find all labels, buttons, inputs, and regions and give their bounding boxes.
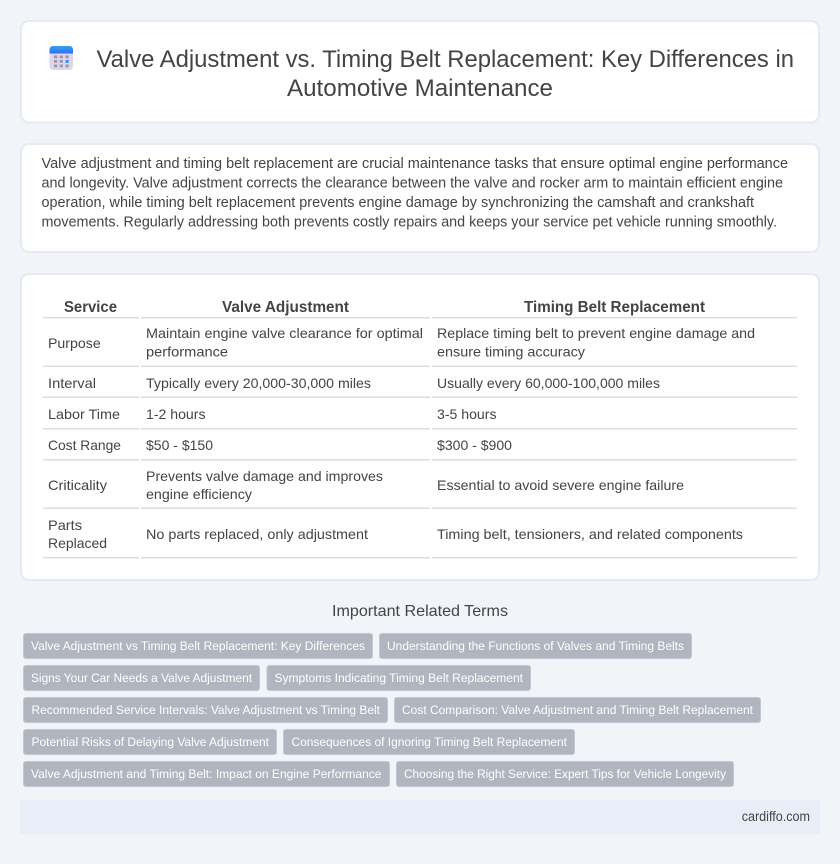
footer bar xyxy=(20,800,820,834)
panel: introduction text: Valve adjustment and timing belt replacement are crucial maintenance tasks that ensure optimal engine performance xyxy=(42,156,788,172)
title xyxy=(96,46,794,102)
row: labor time xyxy=(48,406,496,422)
related term tags: Consequences of Ignoring Timing Belt Replacement xyxy=(292,735,568,749)
row: purpose: ensure timing accuracy xyxy=(437,344,585,360)
row: criticality: Criticality xyxy=(48,477,107,493)
row: interval: Interval xyxy=(48,375,96,391)
heading: important related terms: Important Related Terms xyxy=(332,603,508,620)
row: labor time: 1-2 hours xyxy=(146,406,206,422)
row: purpose xyxy=(48,325,755,360)
related term tags: Cost Comparison: Valve Adjustment and Timing Belt Replacement xyxy=(402,703,754,717)
related term tags: Understanding the Functions of Valves and Timing Belts xyxy=(387,639,684,653)
row: criticality: Essential to avoid severe engine failure xyxy=(437,477,684,493)
related term tags xyxy=(24,634,760,786)
row: parts replaced: No parts replaced, only adjustment xyxy=(146,526,368,542)
row: parts replaced xyxy=(48,517,743,551)
title: Automotive Maintenance xyxy=(287,75,553,102)
row: cost range: $300 - $900 xyxy=(437,437,512,453)
row: labor time: 3-5 hours xyxy=(437,406,496,422)
related term tags: Valve Adjustment vs Timing Belt Replacement: Key Differences xyxy=(31,639,365,653)
row: parts replaced: Parts xyxy=(48,517,82,533)
footer bar: cardiffo.com xyxy=(742,809,810,824)
panel: introduction text xyxy=(21,144,819,252)
panel: introduction text: and longevity. Valve adjustment corrects the clearance between the valve and rocker arm to maintain efficient engine xyxy=(42,176,783,192)
row: criticality: engine efficiency xyxy=(146,486,252,502)
panel: comparison table xyxy=(21,274,819,580)
panel: header xyxy=(21,21,819,122)
row: purpose: Purpose xyxy=(48,335,101,351)
row: criticality: Prevents valve damage and improves xyxy=(146,468,383,484)
table header row: Timing Belt Replacement xyxy=(524,299,706,316)
related term tags: Potential Risks of Delaying Valve Adjustment xyxy=(32,735,270,749)
table header row: Valve Adjustment xyxy=(222,299,350,316)
row: parts replaced: Timing belt, tensioners, and related components xyxy=(437,526,743,542)
related term tags: Choosing the Right Service: Expert Tips for Vehicle Longevity xyxy=(404,767,727,781)
row: purpose: performance xyxy=(146,344,228,360)
row: interval: Usually every 60,000-100,000 miles xyxy=(437,375,660,391)
row: labor time: Labor Time xyxy=(48,406,120,422)
row: interval: Typically every 20,000-30,000 miles xyxy=(146,375,371,391)
row: cost range: Cost Range xyxy=(48,437,121,453)
row: criticality xyxy=(48,468,684,502)
related term tags: Signs Your Car Needs a Valve Adjustment xyxy=(31,671,253,685)
title: Valve Adjustment vs. Timing Belt Replacement: Key Differences in xyxy=(96,46,794,73)
row: purpose: Replace timing belt to prevent engine damage and xyxy=(437,325,755,341)
table header row: Service xyxy=(64,299,117,316)
row: parts replaced: Replaced xyxy=(48,535,107,551)
row: cost range xyxy=(48,437,512,453)
row: purpose: Maintain engine valve clearance for optimal xyxy=(146,325,423,341)
icon: calendar xyxy=(50,46,73,70)
table header row xyxy=(64,299,706,316)
row: cost range: $50 - $150 xyxy=(146,437,213,453)
panel: introduction text: movements. Regularly addressing both prevents costly repairs and keeps your service pet vehicle running smoothly. xyxy=(42,214,777,230)
related term tags: Recommended Service Intervals: Valve Adjustment vs Timing Belt xyxy=(32,703,381,717)
panel: introduction text: operation, while timing belt replacement prevents engine damage by synchronizing the camshaft and crankshaft xyxy=(42,195,754,211)
related term tags: Valve Adjustment and Timing Belt: Impact on Engine Performance xyxy=(31,767,382,781)
related term tags: Symptoms Indicating Timing Belt Replacement xyxy=(274,671,524,685)
row: interval xyxy=(48,375,660,391)
